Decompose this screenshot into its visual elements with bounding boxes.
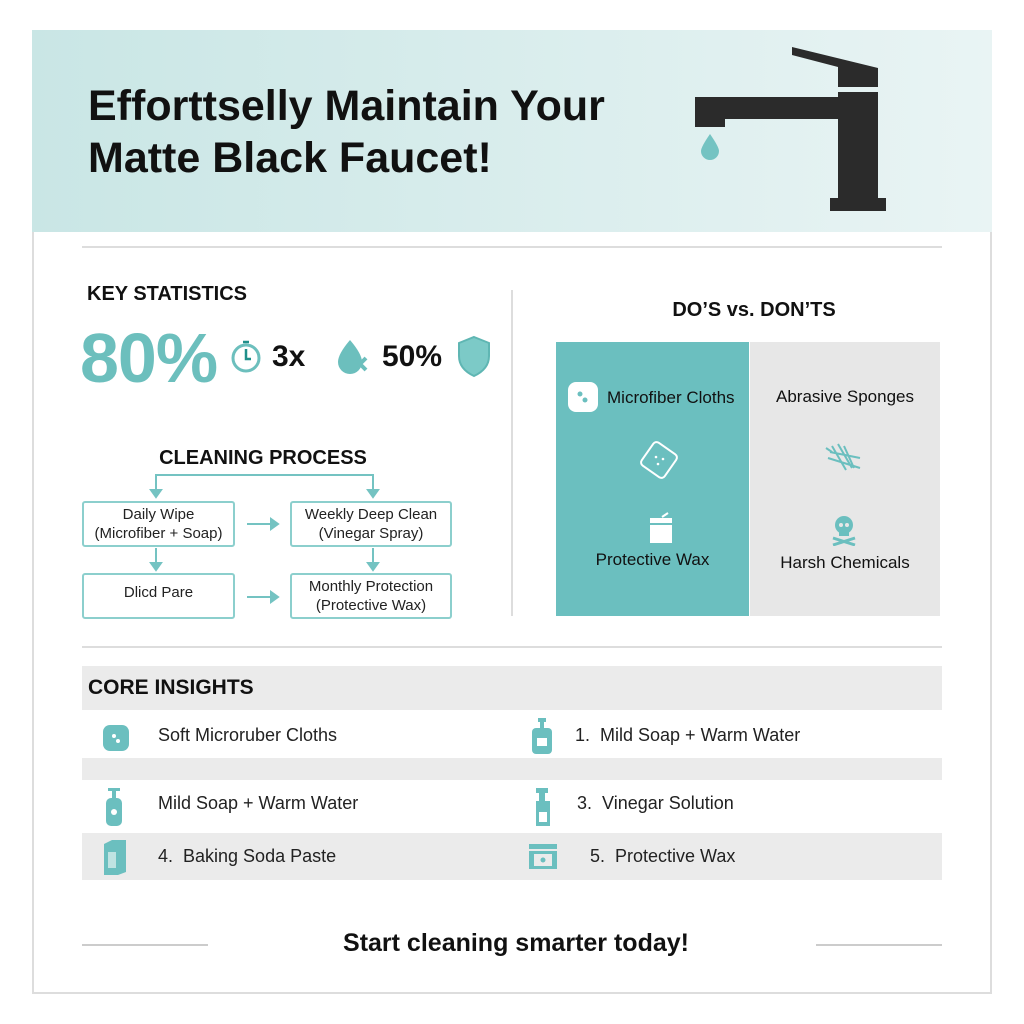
panel: donts: Harsh Chemicals bbox=[780, 553, 910, 572]
stats row: 3x bbox=[272, 340, 305, 373]
step: dlicd pare bbox=[82, 573, 235, 619]
step: daily wipe: Daily Wipe bbox=[123, 506, 194, 523]
icon: timer bbox=[232, 340, 260, 372]
icon: drop bbox=[338, 340, 368, 374]
panel: core insights: 1. Mild Soap + Warm Water bbox=[575, 725, 800, 745]
step: monthly: Monthly Protection bbox=[309, 578, 433, 595]
header band bbox=[32, 30, 992, 232]
heading: dos vs donts: DO’S vs. DON’TS bbox=[672, 299, 836, 321]
step: daily wipe bbox=[82, 501, 235, 547]
heading: core insights: CORE INSIGHTS bbox=[88, 676, 254, 699]
title: Efforttselly Maintain Your bbox=[88, 82, 605, 130]
stats row bbox=[80, 319, 490, 397]
footer bbox=[82, 944, 208, 946]
title bbox=[88, 82, 605, 182]
step: weekly bbox=[290, 501, 452, 547]
heading: key statistics: KEY STATISTICS bbox=[87, 283, 247, 305]
panel: donts bbox=[750, 342, 940, 616]
panel: core insights bbox=[82, 666, 942, 880]
flow arrows bbox=[149, 474, 380, 604]
panel: dos: Microfiber Cloths bbox=[607, 388, 735, 407]
stats row: 50% bbox=[382, 340, 442, 373]
step: monthly: (Protective Wax) bbox=[316, 597, 426, 614]
icon: wax jar bbox=[529, 844, 557, 869]
icon: shield bbox=[458, 336, 490, 377]
title: Matte Black Faucet! bbox=[88, 134, 492, 182]
divider vertical bbox=[511, 290, 513, 616]
panel: dos bbox=[556, 342, 749, 616]
panel: core insights: Soft Microruber Cloths bbox=[158, 725, 337, 745]
panel: core insights: Mild Soap + Warm Water bbox=[158, 793, 358, 813]
panel: core insights: 5. Protective Wax bbox=[590, 846, 735, 866]
panel: dos: Protective Wax bbox=[596, 550, 709, 569]
step: daily wipe: (Microfiber + Soap) bbox=[95, 525, 222, 542]
icon: spray bbox=[536, 788, 550, 826]
icon: pump bbox=[106, 788, 122, 826]
panel: core insights: 3. Vinegar Solution bbox=[577, 793, 734, 813]
footer text: Start cleaning smarter today! bbox=[343, 929, 689, 957]
step: weekly: (Vinegar Spray) bbox=[319, 525, 423, 542]
step: monthly bbox=[290, 573, 452, 619]
icon: soap bottle bbox=[532, 718, 552, 754]
panel: core insights: 4. Baking Soda Paste bbox=[158, 846, 336, 866]
panel: donts: Abrasive Sponges bbox=[776, 387, 914, 406]
icon: box bbox=[104, 840, 126, 875]
step: weekly: Weekly Deep Clean bbox=[305, 506, 437, 523]
heading: cleaning process: CLEANING PROCESS bbox=[159, 447, 367, 469]
stats row: 80% bbox=[80, 319, 217, 397]
step: dlicd pare: Dlicd Pare bbox=[124, 584, 193, 601]
icon: faucet bbox=[695, 47, 886, 211]
icon: cloth bbox=[103, 725, 129, 751]
